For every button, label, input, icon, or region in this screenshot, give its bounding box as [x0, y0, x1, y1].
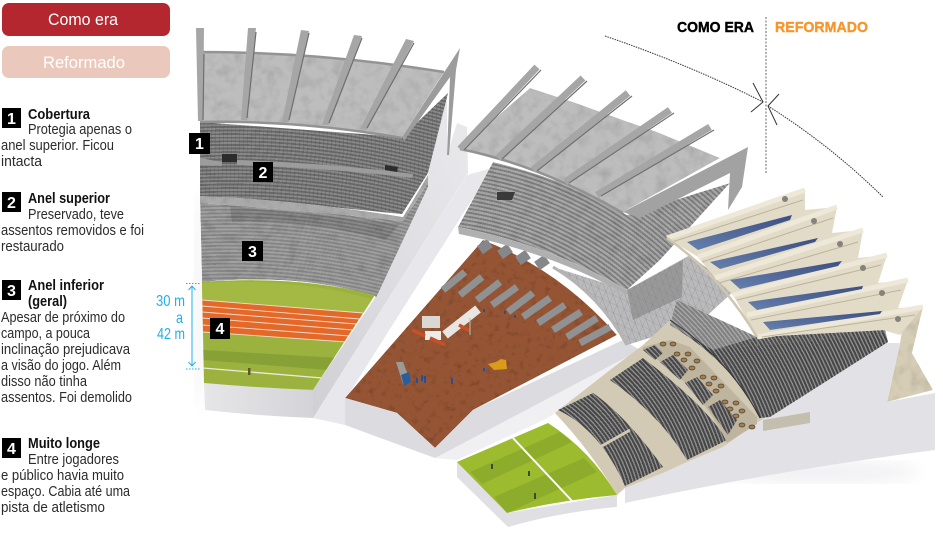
height dimension: 30 m a 42 m: 30 m [156, 293, 185, 310]
marker 1 [189, 133, 210, 154]
height dimension: 30 m a 42 m: a [176, 310, 183, 327]
text block 2: Anel superior: Preservado, teve [28, 206, 124, 223]
text block 3: Anel inferior: disso não tinha [1, 373, 88, 390]
vomitory [497, 192, 515, 200]
text block 3: Anel inferior: assentos. Foi demolido [1, 389, 132, 406]
text block 3: Anel inferior [1, 277, 132, 406]
legend button: Como era: Como era [48, 10, 119, 29]
text block 2: Anel superior: Anel superior [28, 190, 110, 207]
floor shadows [195, 168, 920, 482]
truck [396, 362, 411, 386]
legend button: Reformado [2, 46, 170, 78]
marker 3: 3 [248, 244, 257, 261]
roof with solar panels [667, 190, 923, 337]
text block 2: Anel superior: assentos removidos e foi [1, 222, 144, 239]
text block 2: Anel superior: restaurado [1, 238, 64, 255]
solar panels [687, 215, 882, 330]
side wall [625, 343, 935, 503]
marker 2: 2 [259, 165, 268, 182]
section: stadium as it was, before works [195, 28, 468, 418]
upper seats [670, 300, 888, 418]
roof truss strip [713, 328, 885, 350]
workers [417, 309, 515, 384]
text block 1: Cobertura: 1 [7, 111, 16, 128]
text block 4: Muito longe: Entre jogadores [28, 451, 119, 468]
text block 4: Muito longe [1, 435, 131, 516]
height dimension: 30 m a 42 m [156, 284, 200, 369]
text block 1: Cobertura: intacta [1, 153, 43, 170]
text block 3: Anel inferior: Anel inferior [28, 277, 104, 294]
stands [458, 162, 730, 290]
middle seats [610, 358, 727, 460]
bolts [782, 196, 901, 322]
lower ring stands [200, 177, 428, 298]
text block 3: Anel inferior: Apesar de próximo do [1, 309, 125, 326]
text block 3: Anel inferior: campo, a pouca [1, 325, 91, 342]
text block 4: Muito longe: Muito longe [28, 435, 100, 452]
text block 3: Anel inferior: 3 [7, 283, 16, 300]
base and side [345, 340, 640, 458]
marker 3 [242, 241, 263, 261]
pitch [202, 280, 375, 390]
heading: COMO ERA: COMO ERA [677, 19, 754, 36]
text block 1: Cobertura: Protegia apenas o [28, 121, 132, 138]
legend button: Reformado: Reformado [43, 53, 125, 72]
text block 2: Anel superior: 2 [7, 195, 16, 212]
heading: REFORMADO: REFORMADO [775, 19, 868, 36]
text block 4: Muito longe: pista de atletismo [1, 499, 105, 516]
roof [196, 28, 460, 155]
divider and arrows [605, 17, 883, 197]
height dimension: 30 m a 42 m: 42 m [157, 326, 185, 343]
side wall [313, 95, 468, 418]
beige stand structure [555, 320, 885, 495]
mid walkway [200, 158, 413, 178]
text block 1: Cobertura: Cobertura [28, 106, 91, 123]
terrace with tables [643, 320, 760, 443]
lower seats [558, 393, 663, 486]
text block 4: Muito longe: espaço. Cabia até uma [1, 483, 131, 500]
new steel truss, translucent [553, 255, 735, 345]
base front [204, 383, 313, 418]
legend button: Como era [2, 3, 170, 36]
text block 3: Anel inferior: (geral) [28, 293, 67, 310]
excavator [488, 359, 507, 370]
section: stadium during works [345, 67, 748, 458]
upper ring stands [200, 93, 448, 214]
upper ring slab [200, 175, 428, 221]
crane [412, 309, 478, 345]
marker 4 [210, 318, 230, 339]
marker 2 [253, 162, 273, 182]
text block 1: Cobertura [1, 106, 132, 170]
text block 4: Muito longe: e público havia muito [1, 467, 124, 484]
text block 4: Muito longe: 4 [7, 441, 16, 458]
foundation blocks [443, 272, 610, 343]
running track [202, 300, 363, 342]
roof [460, 67, 748, 218]
text block 3: Anel inferior: inclinação prejudicava [1, 341, 131, 358]
marker 1: 1 [195, 136, 204, 153]
vomitories [222, 154, 398, 172]
excavated ground [345, 240, 617, 448]
text block 2: Anel superior [1, 190, 144, 255]
marker 4: 4 [216, 321, 225, 338]
service opening [763, 412, 810, 431]
text block 1: Cobertura: anel superior. Ficou [1, 137, 114, 154]
section: stadium after renovation [450, 190, 935, 527]
text block 3: Anel inferior: a visão do jogo. Além [1, 357, 121, 374]
pier [887, 307, 933, 402]
field [457, 423, 617, 527]
